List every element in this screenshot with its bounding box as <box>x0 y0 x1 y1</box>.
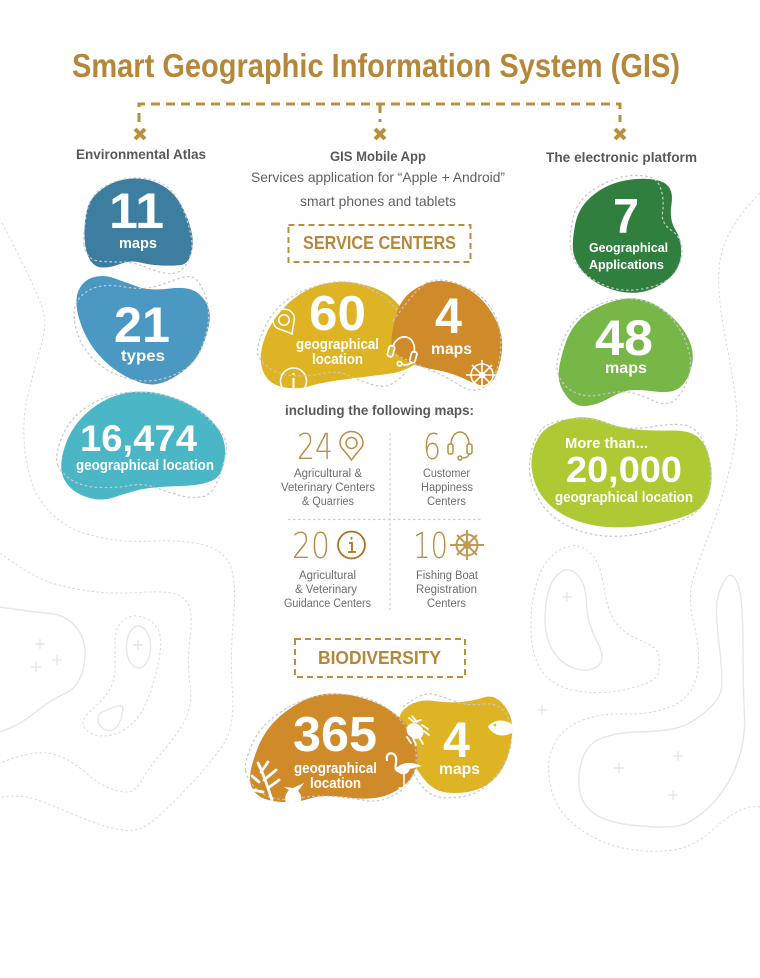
stat: 10 fishing boat centers: Registration <box>416 584 477 596</box>
blob: 7 geographical applications: Applications <box>589 257 664 272</box>
icon: location pin <box>340 432 363 460</box>
stat: 6 customer happiness centers: 6 <box>423 427 441 468</box>
blob: 4 maps: maps <box>431 341 472 358</box>
heading box: biodiversity: BIODIVERSITY <box>318 648 441 668</box>
icon: x marker left <box>135 129 145 139</box>
icon: ship wheel <box>450 530 484 560</box>
stat: 20 guidance centers: & Veterinary <box>295 584 357 596</box>
blob: 4 maps <box>385 280 502 390</box>
blob: 48 maps: maps <box>605 360 647 377</box>
blob: 16,474 geographical location <box>57 391 226 500</box>
icon: info circle <box>338 532 365 558</box>
blob: 365 geographical location: 365 <box>293 708 377 762</box>
blob: 60 geographical location: geographical <box>296 336 379 353</box>
blob: 4 maps biodiversity: 4 <box>443 712 470 768</box>
subheading: including the following maps: including the following maps: <box>285 403 474 418</box>
blob: more than 20,000 geographical location <box>529 417 712 536</box>
icon: flamingo <box>387 753 422 792</box>
stat: 20 guidance centers: Agricultural <box>299 570 356 582</box>
blob: 7 geographical applications: Geographical <box>589 240 668 255</box>
icon: white location pin <box>269 305 302 339</box>
heading: The electronic platform: The electronic platform <box>546 150 697 165</box>
heading: Environmental Atlas: Environmental Atlas <box>76 147 206 162</box>
blob: 21 types: types <box>121 348 165 365</box>
blob: 4 maps biodiversity <box>398 694 520 798</box>
blob: 11 maps <box>84 178 193 274</box>
stat: 10 fishing boat centers: 10 <box>413 526 448 567</box>
stat: 6 customer happiness centers: Centers <box>427 496 466 508</box>
blob: 4 maps biodiversity: maps <box>439 761 480 778</box>
icon: white headset <box>385 333 421 370</box>
stat: 6 customer happiness centers <box>421 427 473 508</box>
icon: fish <box>488 720 512 736</box>
blob: more than 20,000 geographical location: More than... <box>565 436 648 452</box>
text: app description <box>251 169 505 209</box>
background contour map: right <box>531 193 760 851</box>
stat: 24 agricultural centers: & Quarries <box>302 496 354 508</box>
stat: 10 fishing boat centers <box>413 526 484 610</box>
icon: headset <box>448 432 472 460</box>
icon: white ship wheel <box>466 360 496 386</box>
blob: 11 maps: maps <box>119 235 157 252</box>
stat: 24 agricultural centers: Agricultural & <box>294 468 362 480</box>
blob: 365 geographical location <box>245 694 429 803</box>
icon: x marker centre <box>375 129 385 139</box>
stat: 20 guidance centers: 20 <box>292 526 330 567</box>
blob: 48 maps: 48 <box>595 310 653 366</box>
stat: 24 agricultural centers: Veterinary Centers <box>281 482 375 494</box>
connector bracket <box>139 104 620 122</box>
blob: 365 geographical location: geographical <box>294 760 377 777</box>
blob: 21 types: 21 <box>114 297 170 353</box>
blob: 60 geographical location <box>257 282 424 394</box>
icon: white info circle <box>280 367 308 388</box>
stat: 24 agricultural centers: 24 <box>297 427 333 468</box>
blob: 7 geographical applications: 7 <box>613 190 639 244</box>
stat: 10 fishing boat centers: Fishing Boat <box>416 570 479 582</box>
heading box: service centers: SERVICE CENTERS <box>303 233 456 253</box>
icon: turtle <box>284 783 304 803</box>
blob: 21 types <box>74 276 210 385</box>
blob: 60 geographical location: location <box>312 351 363 368</box>
stat: 20 guidance centers <box>284 526 371 610</box>
blob: more than 20,000 geographical location: geographical location <box>555 490 693 506</box>
heading: GIS Mobile App: GIS Mobile App <box>330 149 426 164</box>
heading box: biodiversity <box>295 639 465 677</box>
blob: 365 geographical location: location <box>310 775 361 792</box>
icon: x marker right <box>615 129 625 139</box>
stat: 20 guidance centers: Guidance Centers <box>284 598 371 610</box>
stat: 6 customer happiness centers: Happiness <box>421 482 473 494</box>
blob: 7 geographical applications <box>570 175 682 293</box>
icon: crab <box>405 716 429 745</box>
blob: 4 maps: 4 <box>435 288 462 344</box>
stat: 24 agricultural centers <box>281 427 375 508</box>
blob: 48 maps <box>557 298 693 406</box>
blob: 60 geographical location: 60 <box>309 287 366 341</box>
heading box: service centers <box>288 225 470 262</box>
stat: 10 fishing boat centers: Centers <box>427 598 466 610</box>
icon: coral <box>252 762 279 800</box>
blob: more than 20,000 geographical location: 20,000 <box>566 449 682 490</box>
title: Smart Geographic Information System (GIS) <box>72 47 680 84</box>
text: app description: Services application for “Apple + Android” <box>251 169 505 185</box>
background contour map: left <box>0 223 235 830</box>
blob: 16,474 geographical location: 16,474 <box>80 418 197 459</box>
text: app description: smart phones and tablets <box>300 193 456 209</box>
blob: 11 maps: 11 <box>109 183 164 239</box>
blob: 16,474 geographical location: geographical location <box>76 458 214 474</box>
stat: 6 customer happiness centers: Customer <box>423 468 470 480</box>
